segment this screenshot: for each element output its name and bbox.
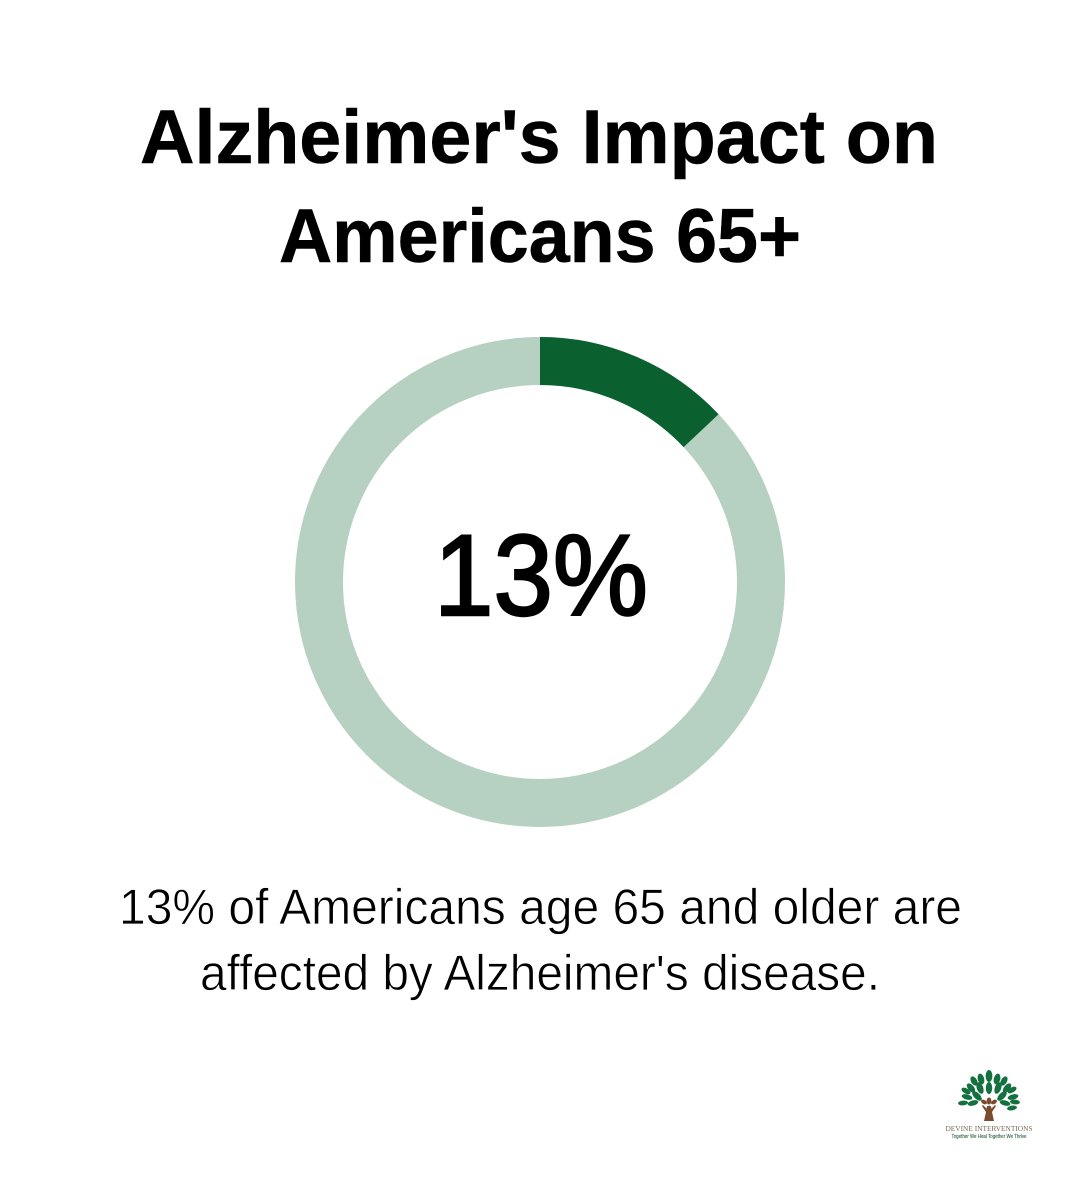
donut centre value: 13% bbox=[434, 512, 648, 640]
logo: Devine Interventions bbox=[946, 1070, 1032, 1140]
logo name: DEVINE INTERVENTIONS bbox=[946, 1125, 1032, 1133]
logo tagline: Together We Heal Together We Thrive bbox=[952, 1134, 1026, 1140]
icon: tree leaves bbox=[958, 1070, 1020, 1111]
description text: affected by Alzheimer's disease. bbox=[200, 945, 880, 1001]
title bbox=[140, 95, 938, 279]
donut chart: 13 percent bbox=[319, 361, 761, 803]
icon: tree trunk figure bbox=[980, 1098, 998, 1121]
title: Alzheimer's Impact on bbox=[140, 95, 938, 180]
description text bbox=[119, 879, 962, 1001]
title: Americans 65+ bbox=[279, 194, 801, 279]
description text: 13% of Americans age 65 and older are bbox=[119, 879, 962, 935]
